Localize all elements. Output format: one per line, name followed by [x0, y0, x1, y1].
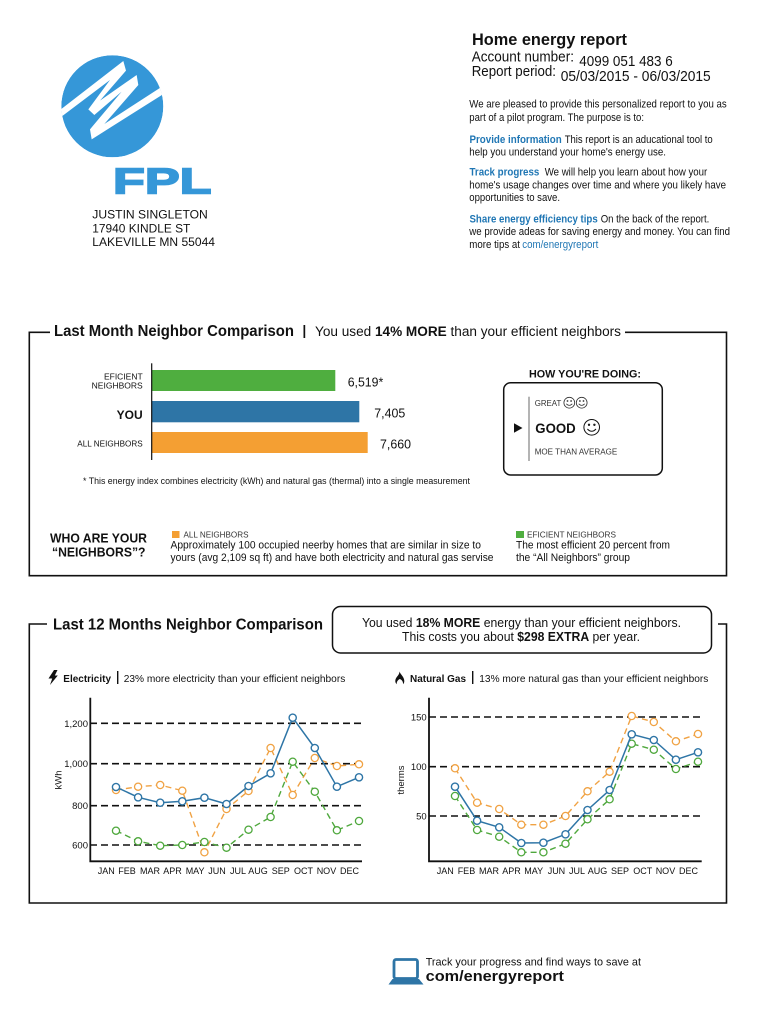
line chart: natural gas: APR: [502, 866, 521, 876]
electricity heading: 23% more electricity than your efficient neighbors: [124, 674, 345, 685]
line chart: electricity: 800: [72, 801, 88, 812]
panel outline: [29, 624, 727, 903]
line chart: natural gas: OCT: [633, 866, 653, 876]
bar chart: 6,519*: [348, 376, 383, 390]
electricity heading: [48, 670, 345, 685]
legend: efficient neighbors: EFICIENT NEIGHBORS: [527, 530, 616, 540]
report title and account details: Account number:: [472, 50, 574, 66]
line chart: electricity: NOV: [317, 866, 336, 876]
icon: lightning bolt: [48, 670, 58, 685]
who are your neighbors heading: [50, 531, 148, 560]
customer address: LAKEVILLE MN 55044: [92, 235, 215, 249]
line chart: natural gas: 150: [411, 712, 427, 724]
line chart: natural gas: MAR: [479, 866, 500, 876]
customer address: 17940 KINDLE ST: [92, 221, 191, 235]
footer call to action: com/energyreport: [426, 969, 564, 985]
callout: This costs you about $298 EXTRA per year.: [402, 630, 640, 644]
line chart: natural gas: NOV: [656, 866, 675, 876]
line chart: electricity: JUN: [208, 866, 226, 876]
electricity heading: Electricity: [63, 674, 111, 685]
intro text block: opportunities to save.: [469, 192, 560, 204]
logo: FPL: [58, 55, 211, 201]
intro text block: home's usage changes over time and where you likely have: [469, 180, 726, 192]
line chart: electricity: OCT: [294, 866, 314, 876]
panel heading: [54, 323, 621, 340]
icon: smiley: [584, 420, 600, 435]
bar chart: NEIGHBORS: [92, 380, 143, 390]
line chart: electricity: JAN: [98, 866, 115, 876]
panel heading: Last 12 Months Neighbor Comparison: [53, 616, 323, 634]
footer call to action: [388, 957, 641, 985]
report title and account details: Home energy report: [472, 31, 627, 49]
line chart: natural gas: SEP: [611, 866, 629, 876]
icon: logo circle with white bolt: [58, 55, 168, 157]
legend: efficient neighbors: The most efficient 20 percent from: [516, 540, 670, 552]
customer address: [92, 208, 215, 249]
intro text block: [468, 99, 730, 251]
bar chart: YOU: [117, 408, 143, 422]
line chart: electricity: JUL: [230, 866, 246, 876]
line chart: electricity: MAR: [140, 866, 160, 876]
bar chart: EFICIENT: [104, 371, 143, 381]
report title and account details: Report period:: [472, 64, 556, 80]
how you're doing rating: [504, 368, 662, 475]
how you're doing rating: GREAT: [535, 398, 561, 408]
customer address: JUSTIN SINGLETON: [92, 208, 208, 222]
bar chart: ALL NEIGHBORS: [77, 438, 143, 448]
report title and account details: 4099 051 483 6: [579, 54, 673, 70]
line chart: electricity: APR: [163, 866, 182, 876]
intro text block: com/energyreport: [522, 239, 599, 251]
how you're doing rating: GOOD: [535, 420, 576, 436]
line chart: electricity: 600: [72, 840, 88, 852]
intro text block: We will help you learn about how your: [545, 167, 708, 179]
bar chart: 7,405: [374, 407, 405, 421]
intro text block: help you understand your home's energy use.: [469, 147, 666, 159]
legend: all neighbors: [170, 530, 494, 564]
legend: efficient neighbors: the “All Neighbors” group: [516, 552, 630, 564]
legend: all neighbors: ALL NEIGHBORS: [184, 530, 249, 540]
callout: [332, 606, 712, 653]
panel heading: Last Month Neighbor Comparison: [54, 323, 294, 340]
line chart: natural gas: JUN: [548, 866, 565, 876]
line chart: natural gas: 100: [411, 762, 427, 773]
panel: last 12 months neighbor comparison: [29, 606, 727, 903]
line chart: natural gas: DEC: [679, 866, 699, 876]
intro text block: Track progress: [470, 167, 539, 179]
intro text block: We are pleased to provide this personalized report to you as: [469, 99, 727, 111]
line chart: natural gas: therms: [396, 765, 407, 795]
bar chart: 7,660: [380, 438, 411, 452]
line chart: natural gas: [396, 698, 702, 876]
panel: last month neighbor comparison: [29, 323, 727, 576]
intro text block: This report is an aducational tool to: [565, 134, 713, 146]
line chart: natural gas: FEB: [458, 866, 475, 876]
intro text block: On the back of the report.: [601, 214, 709, 226]
icon: pointer arrow: [514, 423, 522, 433]
line chart: natural gas: 50: [416, 812, 427, 822]
footnote: * This energy index combines electricity (kWh) and natural gas (thermal) into a single measurement: [83, 476, 470, 486]
report title and account details: 05/03/2015 - 06/03/2015: [561, 69, 711, 85]
line chart: natural gas: AUG: [588, 866, 607, 876]
line chart: electricity: SEP: [272, 866, 290, 876]
intro text block: we provide adeas for saving energy and money. You can find: [468, 226, 730, 238]
how you're doing rating: HOW YOU'RE DOING:: [529, 368, 641, 380]
line chart: natural gas: MAY: [524, 866, 543, 876]
intro text block: part of a pilot program. The purpose is to:: [469, 112, 644, 124]
line chart: natural gas: JAN: [437, 866, 454, 876]
intro text block: Share energy efficiency tips: [470, 214, 598, 226]
panel outline: [29, 332, 727, 576]
who are your neighbors heading: “NEIGHBORS”?: [52, 545, 146, 560]
intro text block: more tips at: [469, 239, 521, 251]
line chart: electricity: MAY: [186, 866, 205, 876]
icon: laptop: [388, 960, 424, 984]
report title and account details: [472, 31, 711, 85]
line chart: electricity: FEB: [118, 866, 136, 876]
line chart: natural gas: JUL: [569, 866, 585, 876]
bar chart: [77, 363, 411, 460]
icon: two smileys: [564, 397, 587, 408]
intro text block: Provide information: [470, 134, 562, 146]
logo wordmark: FPL: [113, 160, 212, 201]
line chart: electricity: kWh: [54, 770, 64, 790]
line chart: electricity: 1,000: [64, 759, 88, 770]
natural gas heading: Natural Gas: [410, 674, 466, 685]
natural gas heading: [395, 671, 708, 685]
line chart: electricity: DEC: [340, 866, 360, 876]
who are your neighbors heading: WHO ARE YOUR: [50, 531, 148, 546]
legend: all neighbors: Approximately 100 occupied neerby homes that are similar in size to: [170, 540, 481, 552]
line chart: electricity: AUG: [248, 866, 268, 876]
icon: flame: [395, 672, 404, 684]
line chart: electricity: 1,200: [64, 719, 88, 730]
callout: You used 18% MORE energy than your efficient neighbors.: [362, 616, 681, 630]
legend: efficient neighbors: [516, 530, 670, 564]
legend: all neighbors: yours (avg 2,109 sq ft) and have both electricity and natural gas servise: [170, 552, 494, 564]
footer call to action: Track your progress and find ways to save at: [426, 957, 641, 969]
natural gas heading: 13% more natural gas than your efficient neighbors: [479, 674, 708, 685]
how you're doing rating: MOE THAN AVERAGE: [535, 447, 618, 457]
line chart: electricity: [54, 698, 363, 876]
panel heading: You used 14% MORE than your efficient neighbors: [315, 324, 621, 340]
